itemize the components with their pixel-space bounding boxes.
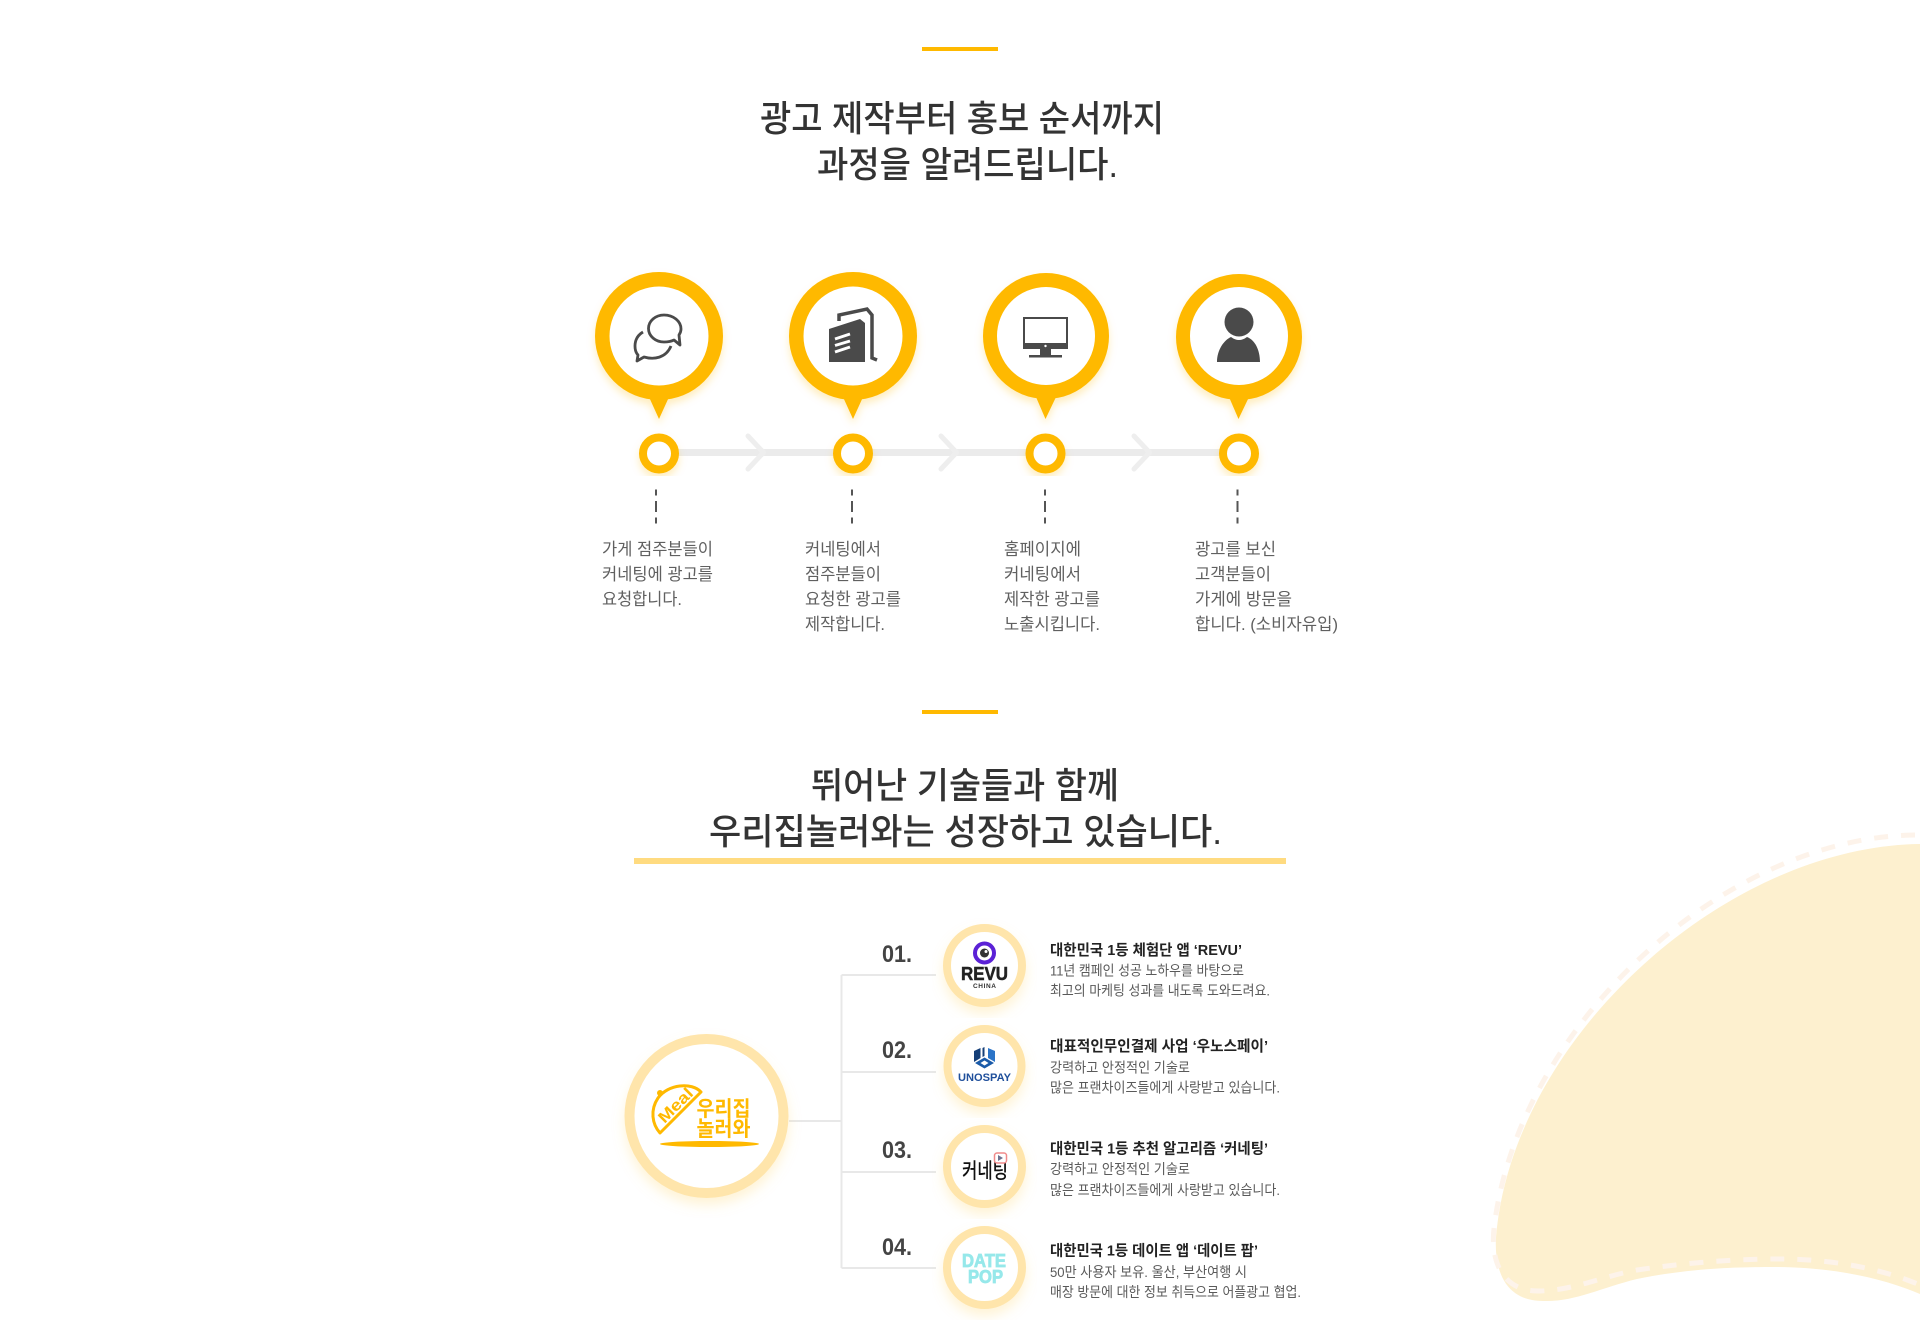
icon: person xyxy=(1217,308,1260,362)
step 1 description: 가게 점주분들이 xyxy=(602,540,713,559)
step 1 description: 커네팅에 광고를 xyxy=(602,565,713,584)
tree connector lines xyxy=(789,975,936,1268)
step 2 description: 요청한 광고를 xyxy=(805,590,901,609)
dashed drop lines xyxy=(656,490,1238,524)
step 4 description: 고객분들이 xyxy=(1195,565,1271,584)
icon: chat bubbles xyxy=(635,315,681,361)
item 03 text: 많은 프랜차이즈들에게 사랑받고 있습니다. xyxy=(1050,1182,1280,1198)
timeline connector line xyxy=(670,436,1230,469)
section 1 title: 광고 제작부터 홍보 순서까지 xyxy=(760,98,1164,139)
item 04 text: 매장 방문에 대한 정보 취득으로 어플광고 협업. xyxy=(1050,1284,1301,1300)
step 3 pin xyxy=(983,273,1109,419)
item 01 text: 대한민국 1등 체험단 앱 ‘REVU’ xyxy=(1050,942,1242,959)
section 1 title xyxy=(760,98,1164,185)
step 4 pin xyxy=(1176,274,1302,419)
item 04 logo: DATE POP: DATE xyxy=(962,1251,1006,1271)
step 4 description: 합니다. (소비자유입) xyxy=(1195,615,1338,634)
step 3 description: 노출시킵니다. xyxy=(1004,615,1100,634)
timeline dots xyxy=(643,438,1255,470)
step 4 description: 가게에 방문을 xyxy=(1195,590,1292,609)
step 3 description: 커네팅에서 xyxy=(1004,565,1081,584)
background blob with dashed outline xyxy=(1493,835,1920,1301)
item 02 text xyxy=(1050,1038,1280,1096)
step 2 description: 제작합니다. xyxy=(805,615,885,634)
item 02 logo: UNOSPAY: UNOSPAY xyxy=(958,1072,1012,1084)
item 04 logo: DATE POP xyxy=(947,1230,1022,1305)
item 02 text: 대표적인무인결제 사업 ‘우노스페이’ xyxy=(1050,1038,1268,1055)
item 04 number: 04. xyxy=(882,1234,912,1261)
item 01 logo: REVU: REVU xyxy=(961,964,1008,984)
step 2 pin xyxy=(789,272,917,419)
section 1 title: 과정을 알려드립니다. xyxy=(817,144,1118,185)
item 03 logo: 커네팅: 커네팅 xyxy=(962,1160,1008,1183)
step 4 description: 광고를 보신 xyxy=(1195,540,1276,559)
item 03 logo: 커네팅 xyxy=(947,1129,1022,1204)
logo: wordmark: 놀러와 xyxy=(696,1118,750,1141)
item 01 number: 01. xyxy=(882,941,912,968)
item 01 logo: REVU xyxy=(947,928,1022,1003)
item 03 text: 대한민국 1등 추천 알고리즘 ‘커네팅’ xyxy=(1050,1140,1268,1158)
item 02 logo: UNOSPAY xyxy=(948,1029,1022,1103)
step 2 description xyxy=(805,540,901,634)
logo: cloche icon xyxy=(653,1085,701,1133)
item 03 text xyxy=(1050,1140,1280,1198)
step 1 pin xyxy=(595,272,723,419)
item 04 logo: DATE POP: POP xyxy=(968,1267,1003,1287)
icon: monitor xyxy=(1023,317,1068,358)
logo: wordmark xyxy=(696,1098,750,1141)
step 3 description xyxy=(1004,540,1100,634)
item 02 text: 많은 프랜차이즈들에게 사랑받고 있습니다. xyxy=(1050,1080,1280,1096)
section 2 title xyxy=(709,765,1222,852)
item 01 text: 최고의 마케팅 성과를 내도록 도와드려요. xyxy=(1050,982,1270,998)
step 4 description xyxy=(1195,540,1338,634)
item 04 text: 50만 사용자 보유. 울산, 부산여행 시 xyxy=(1050,1264,1247,1280)
step 3 description: 제작한 광고를 xyxy=(1004,590,1100,609)
step 3 description: 홈페이지에 xyxy=(1004,540,1081,559)
item 01 logo: REVU: CHINA xyxy=(973,983,996,990)
item 02 text: 강력하고 안정적인 기술로 xyxy=(1050,1060,1190,1076)
section 2 title: 우리집놀러와는 성장하고 있습니다. xyxy=(709,811,1222,852)
item 03 text: 강력하고 안정적인 기술로 xyxy=(1050,1161,1190,1177)
section 1 accent bar xyxy=(922,47,998,51)
section 2 title: 뛰어난 기술들과 함께 xyxy=(811,765,1119,806)
central logo circle xyxy=(630,1039,784,1193)
step 2 description: 점주분들이 xyxy=(805,565,881,584)
icon: building xyxy=(829,309,877,362)
item 01 text xyxy=(1050,942,1270,998)
item 02 number: 02. xyxy=(882,1037,912,1064)
item 04 text xyxy=(1050,1242,1301,1300)
section 2 accent bar xyxy=(922,710,998,714)
step 1 description xyxy=(602,540,713,609)
item 01 text: 11년 캠페인 성공 노하우를 바탕으로 xyxy=(1050,962,1244,978)
item 03 number: 03. xyxy=(882,1137,912,1164)
logo: wordmark: 우리집 xyxy=(696,1098,750,1121)
title underline xyxy=(634,858,1286,864)
logo: cloche icon: Meal xyxy=(655,1085,697,1127)
step 1 description: 요청합니다. xyxy=(602,590,682,609)
item 04 text: 대한민국 1등 데이트 앱 ‘데이트 팝’ xyxy=(1050,1242,1258,1260)
step 2 description: 커네팅에서 xyxy=(805,540,881,559)
